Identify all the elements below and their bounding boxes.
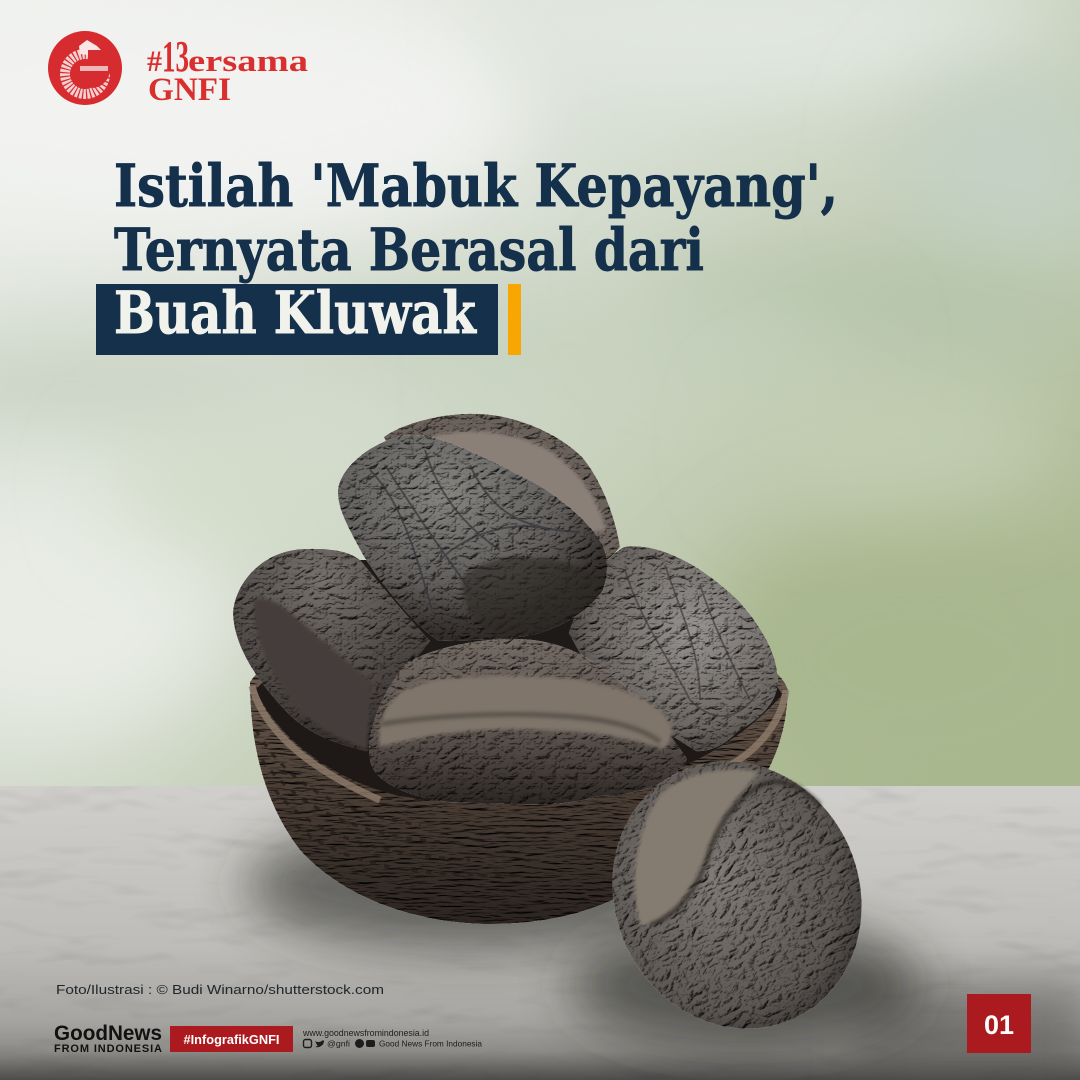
icon: loose nut on table [569,720,905,1070]
hashtag badge [170,1026,293,1052]
icon: top nut with veins [338,435,607,641]
bowl rim highlights [252,686,786,800]
concrete table surface [0,786,1080,1080]
icon: left nut [233,549,430,751]
title: Ternyata Berasal dari [114,216,704,284]
bowl grain dashes [256,730,775,875]
shadows under bowl and nut [245,820,920,1047]
title: Istilah 'Mabuk Kepayang', [114,152,838,220]
website and social handles [302,1028,482,1048]
GoodNews logo: FROM INDONESIA [54,1043,162,1055]
logo text: #13ersama GNFI: 13 [162,32,189,81]
icon: right nut [569,546,778,751]
logo text: #13ersama GNFI: GNFI [148,72,231,108]
icon: wooden bowl [248,674,790,924]
GoodNews logo [54,1022,162,1055]
icon: back nut [384,414,620,620]
hashtag badge: #InfografikGNFI [184,1033,280,1047]
icon: front nut in bowl [369,639,687,804]
photo credit: Foto/Ilustrasi : © Budi Winarno/shutterstock.com [56,982,384,997]
website and social handles: www.goodnewsfromindonesia.id [302,1028,429,1038]
logo text: #13ersama GNFI: ersama [188,43,309,78]
highlighted title: Buah Kluwak: Buah Kluwak [114,279,478,347]
GoodNews logo: GoodNews [54,1022,162,1045]
logo text: #13ersama GNFI: # [147,45,162,78]
nut pile dark gaps [360,560,620,700]
website and social handles: @gnfi [327,1038,350,1048]
bowl interior [256,623,782,803]
page number [967,994,1031,1053]
title [114,152,838,284]
website and social handles: Good News From Indonesia [379,1038,482,1048]
page number: 01 [984,1010,1014,1040]
logo text: #13ersama GNFI [147,32,309,108]
blurred green background [0,0,1080,810]
logo: GNFI emblem [48,31,122,105]
